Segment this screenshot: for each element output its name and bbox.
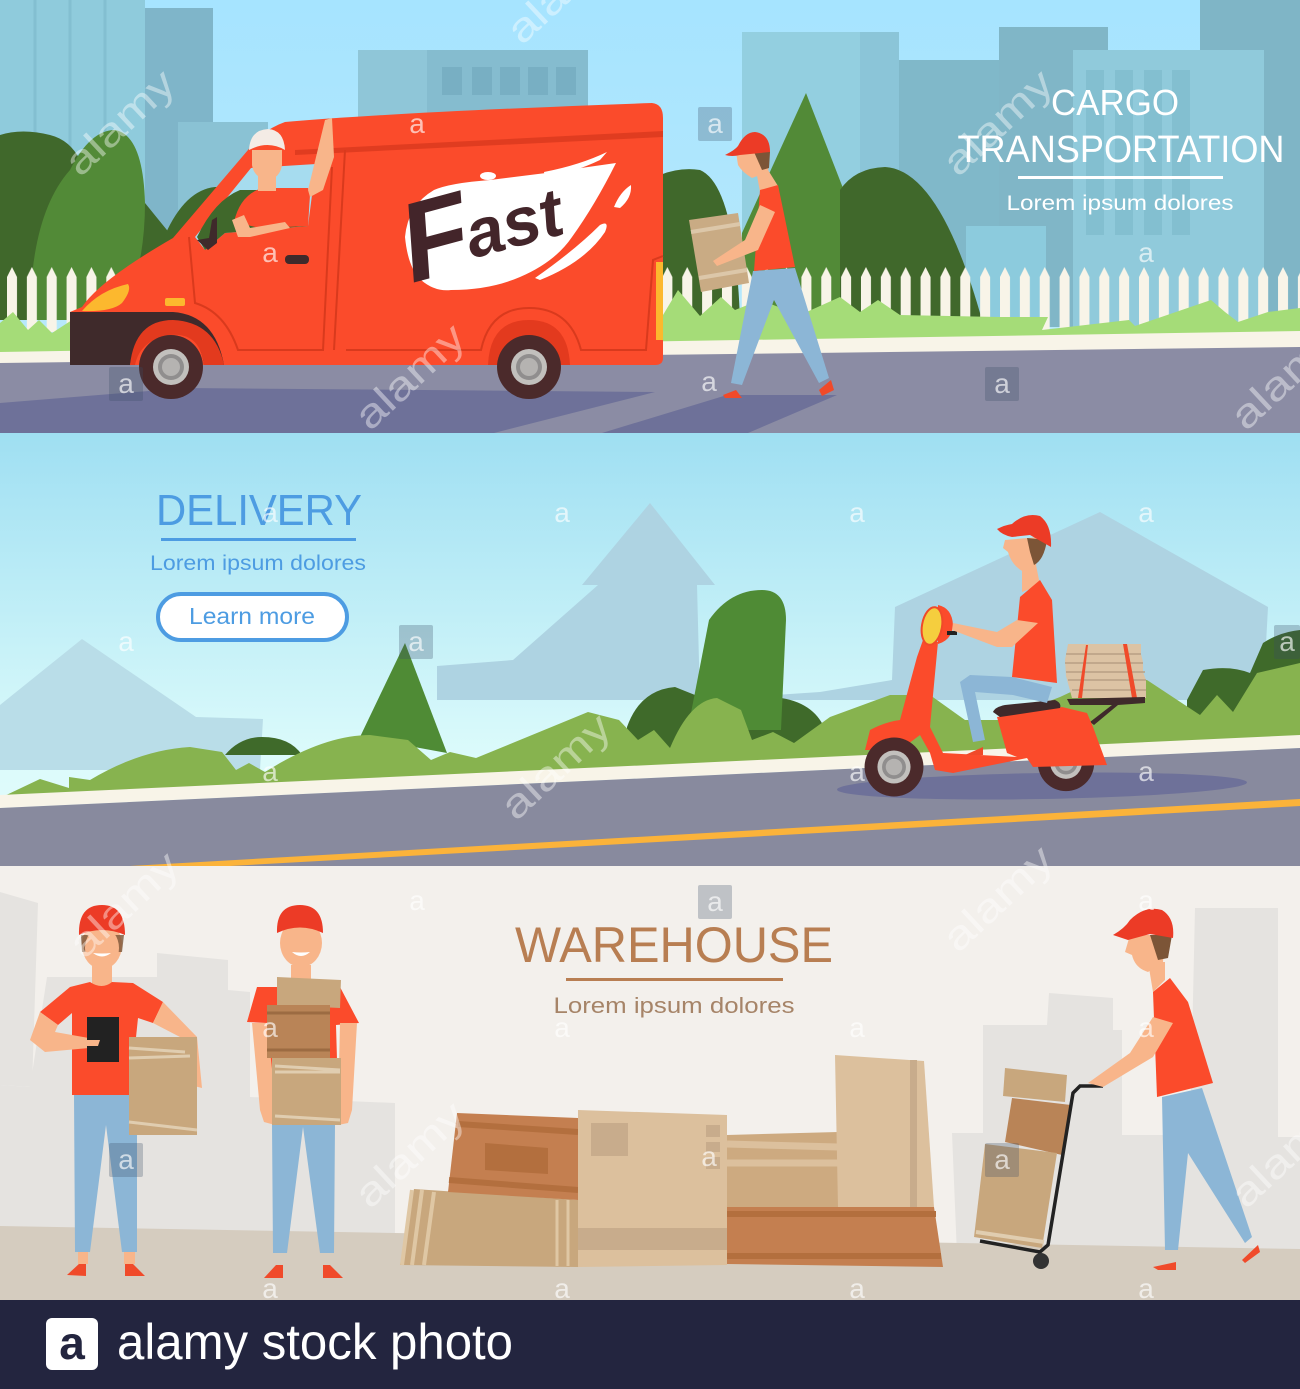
watermark: a badges: a	[409, 885, 425, 916]
head	[1003, 537, 1040, 572]
hand truck wheel	[1033, 1253, 1049, 1269]
box middle	[267, 1005, 330, 1058]
van body	[70, 103, 663, 365]
watermark: a badges: a	[701, 1141, 717, 1172]
van door lines	[189, 150, 663, 350]
heading: delivery: DELIVERY	[156, 486, 362, 535]
grass	[0, 290, 1300, 355]
van window	[195, 164, 316, 250]
heading: cargo transportation: TRANSPORTATION	[958, 129, 1284, 171]
neck	[291, 965, 311, 987]
mirror	[197, 217, 217, 250]
box pile	[400, 1055, 943, 1267]
hand	[70, 1040, 100, 1046]
footer logo	[46, 1317, 98, 1370]
grass hills	[0, 663, 1300, 800]
watermark: a badges	[109, 107, 1300, 1304]
road centre line	[130, 799, 1300, 866]
arm	[1088, 1017, 1173, 1087]
arms	[252, 1023, 357, 1125]
scooter seat	[993, 700, 1060, 717]
watermark: a badges: a	[554, 1273, 570, 1304]
hair	[81, 935, 124, 952]
curb	[0, 331, 1300, 364]
watermark: a badges: a	[409, 108, 425, 139]
watermark: a badges: a	[994, 368, 1010, 399]
bushes and trees right	[660, 93, 982, 320]
watermark: a badges: a	[554, 497, 570, 528]
headset	[938, 605, 953, 644]
watermark: a badges: a	[118, 626, 134, 657]
courier carrying box	[689, 132, 834, 398]
watermark: a badges: a	[262, 1273, 278, 1304]
footer bar	[0, 1300, 1300, 1389]
box	[129, 1037, 197, 1135]
bottom right box	[727, 1207, 943, 1267]
shoes	[1153, 1245, 1260, 1270]
worker with clipboard	[30, 905, 202, 1276]
watermark: a badges: a	[849, 756, 865, 787]
shoes	[67, 1263, 145, 1276]
clipboard	[87, 1017, 119, 1062]
neck	[756, 170, 778, 192]
neck	[1148, 962, 1165, 992]
sky	[0, 0, 1300, 433]
watermark: a badges: a	[262, 497, 278, 528]
shirt	[1153, 978, 1213, 1097]
box	[689, 213, 749, 292]
hair	[754, 152, 770, 170]
headlight	[919, 606, 945, 646]
box bottom	[272, 1058, 341, 1125]
head	[280, 919, 322, 967]
cap	[79, 905, 125, 935]
watermark: alamy diagonal text: alamy	[934, 61, 1062, 185]
trousers	[960, 675, 1052, 742]
pizza boxes	[1065, 644, 1146, 698]
shirt	[1012, 580, 1057, 683]
heading: cargo transportation	[958, 82, 1284, 215]
trousers	[1162, 1088, 1252, 1250]
delivery van	[70, 103, 663, 399]
mountains and arrow hills	[0, 503, 1268, 770]
cap	[725, 132, 770, 156]
handle	[947, 631, 957, 635]
watermark: a badges: a	[849, 497, 865, 528]
cap	[1113, 909, 1173, 940]
head	[736, 150, 770, 178]
road	[0, 748, 1300, 866]
watermark: a badges: a	[554, 1012, 570, 1043]
background shelves	[0, 892, 1300, 1255]
watermark: a badges: a	[408, 626, 424, 657]
arm	[952, 620, 1038, 647]
watermark: a badges: a	[262, 1012, 278, 1043]
headlight	[82, 284, 129, 311]
hair	[1150, 935, 1172, 960]
rear wheel	[497, 335, 561, 399]
watermark: a badges: a	[1138, 1012, 1154, 1043]
heading: cargo transportation: Lorem ipsum dolores	[1006, 191, 1234, 215]
trousers	[74, 1095, 137, 1252]
heading: warehouse: WAREHOUSE	[515, 917, 833, 973]
front wheel	[865, 738, 923, 796]
shoe	[965, 747, 983, 755]
watermark: alamy diagonal text: alamy	[346, 1093, 474, 1217]
panel: warehouse	[0, 866, 1300, 1300]
courier shadow	[602, 395, 837, 433]
arm pointing	[30, 1012, 100, 1052]
scooter body	[865, 640, 1107, 773]
shirt	[754, 185, 795, 271]
door handle	[285, 255, 309, 264]
cap	[997, 515, 1051, 547]
road	[0, 347, 1300, 433]
worker with stacked boxes	[247, 905, 359, 1278]
fast logo blob	[405, 152, 631, 290]
front wheel arch	[130, 320, 224, 365]
fast logo text: ast	[456, 174, 573, 273]
neck	[92, 965, 112, 987]
head	[1125, 935, 1165, 972]
panel: cargo transportation	[0, 0, 1300, 433]
watermark: a badges: a	[849, 1012, 865, 1043]
watermark: a badges: a	[1138, 237, 1154, 268]
scooter rider	[837, 515, 1247, 803]
front bumper	[70, 312, 224, 365]
watermark: a badges: a	[701, 366, 717, 397]
watermark: a badges: a	[1138, 497, 1154, 528]
shirt	[247, 987, 359, 1095]
watermark: a badges: a	[1138, 756, 1154, 787]
neck	[1022, 560, 1040, 592]
hand truck frame	[980, 1086, 1103, 1252]
bushes and trees left	[0, 130, 250, 320]
watermark: a badges: a	[262, 237, 278, 268]
watermark: a badges: a	[1138, 1273, 1154, 1304]
floor	[0, 1226, 1300, 1300]
scooter shadow	[837, 769, 1247, 803]
footer text: alamy stock photo	[117, 1314, 513, 1370]
panel: delivery	[0, 433, 1300, 866]
watermark: alamy diagonal text: alamy	[492, 705, 620, 829]
white picket fence	[0, 267, 1300, 332]
heading: delivery: Lorem ipsum dolores	[150, 551, 366, 575]
tall box	[835, 1055, 934, 1207]
shoes	[723, 380, 834, 398]
smile	[292, 952, 310, 956]
head	[82, 921, 122, 969]
watermark: alamy diagonal text: alamy	[60, 843, 188, 967]
watermark: a badges: a	[994, 1144, 1010, 1175]
watermark: alamy diagonal text: alamy	[56, 61, 184, 185]
button: learn more: Learn more	[189, 603, 315, 629]
curb	[0, 735, 1300, 808]
large box	[578, 1110, 727, 1267]
right mid box	[727, 1132, 838, 1207]
background	[0, 866, 1300, 1300]
marker light	[165, 298, 185, 306]
city buildings	[0, 0, 1300, 332]
rear wheel arch	[488, 320, 570, 365]
cap	[277, 905, 323, 933]
watermark: a badges: a	[118, 1144, 134, 1175]
shoes	[264, 1265, 343, 1278]
watermark: a badges: a	[707, 108, 723, 139]
watermark: a badges: a	[849, 1273, 865, 1304]
watermark: alamy diagonal text: alamy	[934, 837, 1062, 961]
trees and bushes	[225, 590, 1300, 760]
van roof stripe	[295, 131, 663, 155]
watermark: a badges: a	[1138, 885, 1154, 916]
rear wheel	[1038, 735, 1094, 791]
ankles	[78, 1252, 135, 1264]
trousers	[731, 268, 829, 385]
rear rack	[1067, 697, 1145, 725]
heading: delivery	[150, 486, 366, 575]
worker with hand truck	[974, 909, 1260, 1270]
rear lights	[656, 262, 663, 340]
watermark: a badges: a	[1279, 626, 1295, 657]
front wheel	[139, 335, 203, 399]
footer logo: a	[59, 1317, 85, 1369]
button: learn more	[158, 594, 347, 640]
driver	[232, 118, 334, 237]
watermark: a badges: a	[707, 886, 723, 917]
fast logo text: F	[386, 167, 487, 306]
smile	[93, 953, 111, 956]
watermark: a badges: a	[262, 756, 278, 787]
trousers	[272, 1125, 335, 1253]
mid left box	[448, 1113, 578, 1200]
van shadow	[0, 388, 655, 433]
arm	[713, 205, 775, 266]
window bush	[197, 190, 308, 250]
bottom left box	[400, 1189, 578, 1267]
arm around box	[153, 1002, 202, 1088]
rider	[952, 515, 1057, 755]
heading: cargo transportation: CARGO	[1051, 82, 1179, 123]
watermark: a badges: a	[118, 368, 134, 399]
hand truck boxes	[1003, 1068, 1067, 1102]
heading: warehouse	[515, 917, 833, 1018]
sky	[0, 433, 1300, 866]
heading: warehouse: Lorem ipsum dolores	[554, 993, 794, 1018]
hair	[1027, 538, 1047, 565]
watermark: alamy diagonal text: alamy	[346, 315, 474, 439]
box top	[277, 977, 341, 1008]
shirt	[40, 982, 163, 1095]
